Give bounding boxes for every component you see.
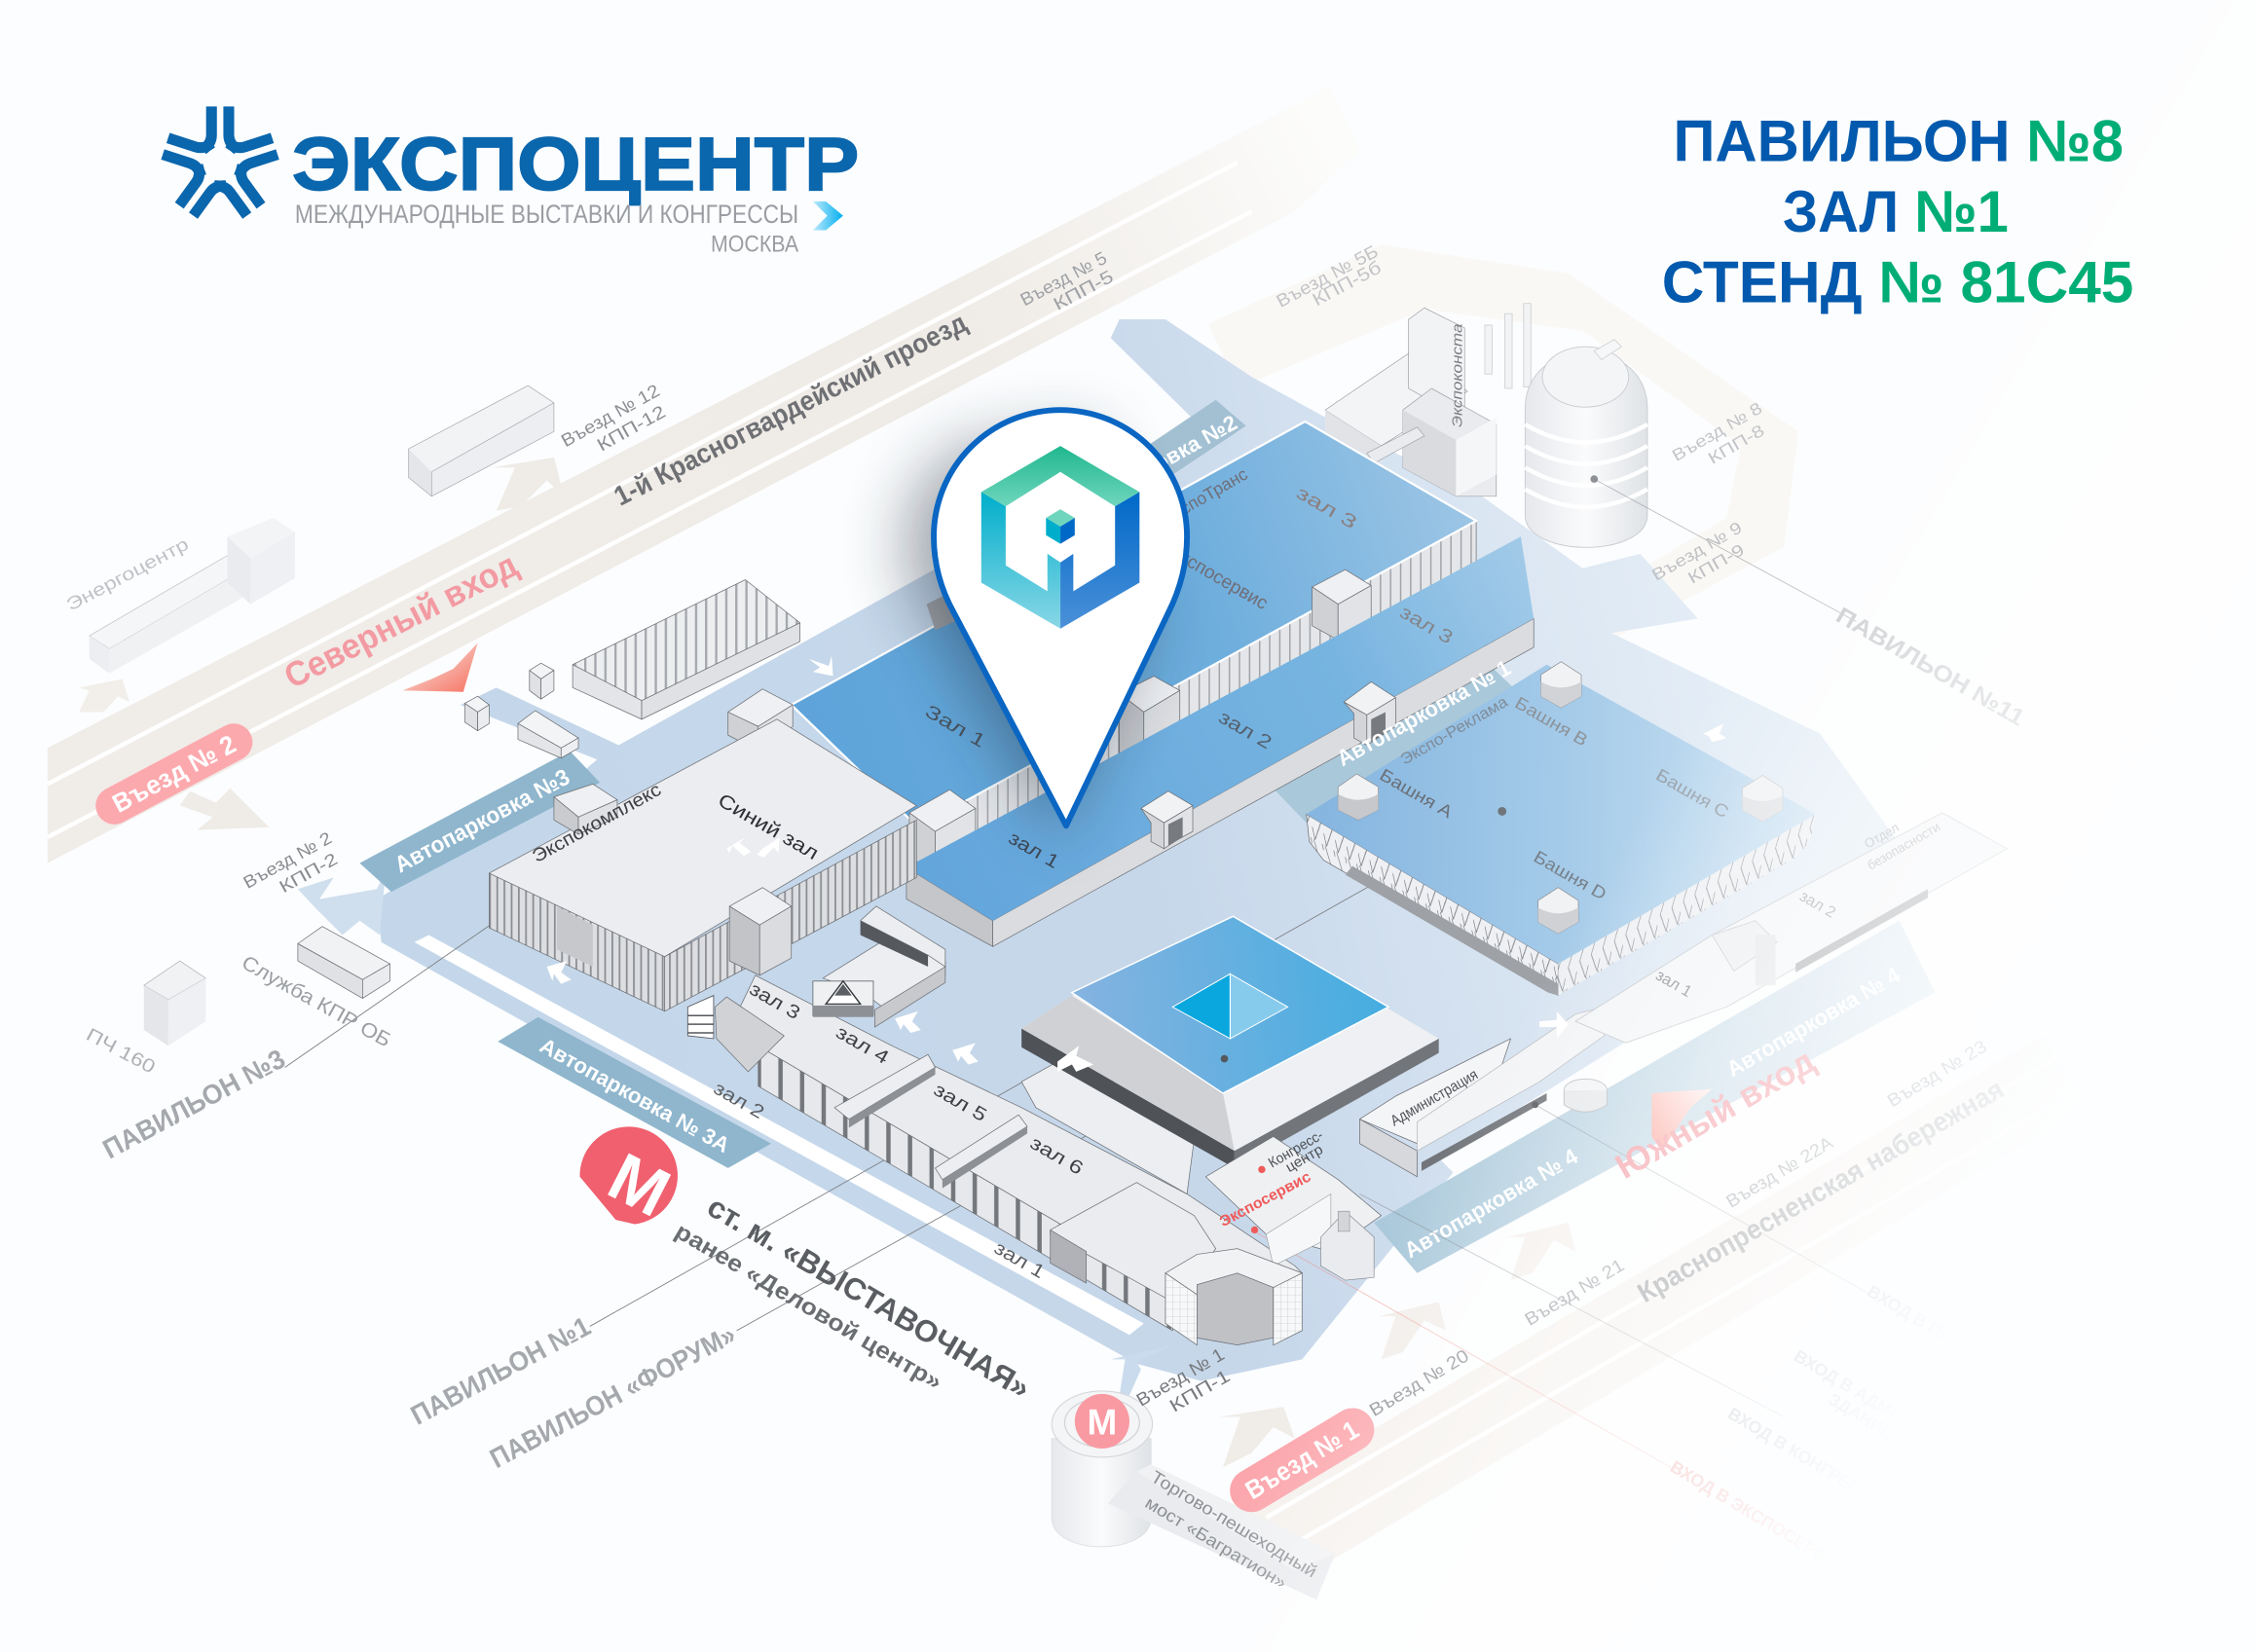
north labels: КПП-8 — [1705, 422, 1767, 468]
white direction arrows — [547, 656, 1726, 1072]
building: factory Экспоконсетта — [1325, 304, 1531, 496]
building: long halls 3–6 roof and wall: зал 2 — [710, 1079, 767, 1123]
building: east halls Зал 1 and Зал 2: Отдел — [1862, 820, 1902, 851]
metro cylinder with bridge: мост «Багратион» — [1142, 1492, 1290, 1593]
label: ст. м. Выставочная: ст. м. «ВЫСТАВОЧНАЯ» — [702, 1190, 1036, 1406]
building: Экспокомплекс / Синий зал — [489, 719, 916, 1011]
north labels — [62, 240, 2028, 731]
building: Въезд № 12 — [409, 385, 554, 496]
south entrance labels: ВХОД В ПАВИЛЬОН — [1864, 1281, 2020, 1385]
building: Павильон 8, lower hall with Зал 1 — [906, 536, 1534, 946]
ground plate — [298, 319, 1913, 1381]
building: Конгресс-центр with Экспосервис: Конгресс- — [1266, 1127, 1326, 1171]
building: Экспо arena with four towers — [1307, 654, 1816, 996]
building: east halls Зал 1 and Зал 2 — [1575, 813, 2007, 1043]
building: Павильон 8, lower hall with Зал 1: зал 2 — [1215, 707, 1275, 753]
building: Энергоцентр — [90, 518, 295, 674]
north labels: КПП-9 — [1684, 540, 1748, 587]
pill: Въезд № 1 — [1222, 1400, 1383, 1520]
building: Экспо arena with four towers: Башня B — [1512, 693, 1591, 750]
west labels: КПП-2 — [276, 849, 341, 897]
south entrance labels: Въезд № 22А — [1722, 1131, 1837, 1212]
building: Администрация: Администрация — [1387, 1067, 1481, 1130]
road: east service arc — [1208, 244, 1798, 641]
west labels: Въезд № 2 — [240, 828, 335, 893]
north labels: КПП-5б — [1309, 257, 1385, 310]
south entrance labels — [1132, 1036, 2020, 1579]
icon: chevron — [813, 202, 843, 230]
building: Павильон 8, upper hall roof: Экспосервис — [1165, 540, 1272, 614]
south entrance labels: ЗДАНИЕ — [1826, 1389, 1897, 1443]
building: factory Экспоконсетта: Экспоконста — [1450, 323, 1465, 427]
band: Автопарковка №2 — [1036, 400, 1246, 547]
logo: Экспоцентр — [160, 106, 859, 258]
south entrance labels: Южный вход — [1609, 1041, 1822, 1187]
north labels: Въезд № 8 — [1669, 399, 1765, 465]
south entrance labels: Въезд № 1 — [1132, 1343, 1228, 1411]
building: east halls Зал 1 and Зал 2: безопасности — [1865, 820, 1942, 873]
heading: stand information — [1662, 108, 2133, 314]
building: ПЧ 160 — [144, 961, 205, 1046]
building: cylinder tower — [1525, 340, 1647, 547]
white access strip — [415, 936, 1144, 1335]
label: Автопарковка №2: Автопарковка №2 — [1061, 410, 1241, 525]
building: east halls Зал 1 and Зал 2: зал 2 — [1796, 887, 1838, 922]
label: Северный вход: Северный вход — [277, 545, 524, 696]
logo: Экспоцентр: МОСКВА — [711, 233, 798, 258]
pill: Въезд № 1: Въезд № 1 — [1240, 1414, 1364, 1505]
band: Автопарковка № 4: Автопарковка № 4 — [1722, 962, 1905, 1082]
pill: Въезд № 2: Въезд № 2 — [107, 729, 240, 819]
building: long halls 3–6 roof and wall — [710, 975, 1302, 1331]
north labels: КПП-12 — [593, 401, 669, 456]
icon: metro marker: М — [597, 1138, 682, 1231]
icon: star emblem — [160, 106, 280, 221]
building: Служба КПР ОБ — [298, 927, 389, 999]
road title: 1-й Красногвардейский проезд: 1-й Красногвардейский проезд — [610, 307, 972, 512]
building: Конгресс-центр with Экспосервис: Экспосервис — [1217, 1168, 1314, 1230]
road: 1-й Красногвардейский проезд — [48, 87, 1359, 863]
label: ст. м. Выставочная: ранее «Деловой центр» — [671, 1219, 946, 1396]
building: Администрация — [1359, 1007, 1608, 1177]
arrow: Южный вход — [1651, 1089, 1712, 1151]
building: annex near Зал 3 — [823, 906, 945, 1027]
building: Экспокомплекс / Синий зал: Синий зал — [714, 789, 822, 864]
building: pavilion with blue roof and pyramid — [1021, 916, 1439, 1168]
metro cylinder with bridge — [1052, 1391, 1335, 1599]
building: side block Зал 2 — [687, 996, 784, 1072]
icon: cube logo — [981, 446, 1139, 629]
small kiosks north — [464, 663, 578, 758]
north labels: Въезд № 5 — [1017, 247, 1110, 310]
pin shadow — [905, 431, 1151, 841]
logo: Экспоцентр: МЕЖДУНАРОДНЫЕ ВЫСТАВКИ И КОНГРЕССЫ — [295, 200, 798, 229]
heading: stand information: СТЕНД № 81С45 — [1662, 248, 2133, 314]
band: Автопарковка № 4 — [1374, 921, 1935, 1273]
building: Экспо arena with four towers: Башня C — [1652, 765, 1732, 822]
building: long halls 3–6 roof and wall: зал 6 — [1026, 1133, 1087, 1180]
west labels — [83, 828, 741, 1474]
south entrance labels: КПП-1 — [1165, 1365, 1234, 1416]
building: Конгресс-центр with Экспосервис: центр — [1283, 1142, 1326, 1176]
band: Автопарковка № 4: Автопарковка № 4 — [1400, 1143, 1582, 1263]
north labels: Энергоцентр — [62, 533, 192, 615]
west labels: ПАВИЛЬОН №3 — [98, 1044, 290, 1164]
arrow: Въезд № 1 КПП-1 — [1111, 1345, 1172, 1395]
south entrance labels: ВХОД В АДМИНИСТРАТ. — [1791, 1346, 1977, 1468]
building: Павильон 8, lower hall with Зал 1: зал 1 — [1005, 828, 1062, 873]
band: Автопарковка №3: Автопарковка №3 — [390, 765, 574, 878]
building: east halls Зал 1 and Зал 2: зал 1 — [1652, 967, 1695, 1001]
building: long halls 3–6 roof and wall: зал 4 — [832, 1022, 893, 1069]
west labels: ПЧ 160 — [83, 1025, 159, 1078]
north labels: Въезд № 9 — [1648, 518, 1745, 584]
band: Автопарковка №3 — [359, 751, 600, 892]
metro cylinder with bridge: Торгово-пешеходный — [1148, 1467, 1320, 1581]
road: Краснопресненская набережная — [1220, 1036, 2087, 1560]
arrow: Северный вход — [403, 643, 478, 692]
heading: stand information: ПАВИЛЬОН №8 — [1674, 108, 2124, 174]
north labels: Въезд № 5Б — [1273, 240, 1382, 312]
west labels: ПАВИЛЬОН №1 — [406, 1311, 595, 1431]
south entrance labels: Въезд № 20 — [1365, 1345, 1472, 1420]
building: church — [1321, 1211, 1374, 1280]
band: Автопарковка №1 — [1269, 665, 1519, 823]
building: Павильон 8, upper hall roof: зал 3 — [1292, 483, 1360, 533]
west labels: ПАВИЛЬОН «ФОРУМ» — [485, 1319, 741, 1474]
building: long halls 3–6 roof and wall: зал 1 — [990, 1238, 1048, 1283]
north labels: Въезд № 12 — [557, 380, 663, 451]
south entrance labels: Въезд № 21 — [1521, 1255, 1628, 1330]
south entrance labels: Въезд № 23 — [1883, 1036, 1990, 1111]
south entrance labels: ВХОД В ЭКСПОСЕРВИС — [1667, 1456, 1852, 1579]
metro cylinder with bridge: М — [1088, 1402, 1117, 1442]
building: Павильон 8, lower hall with Зал 1: зал 3 — [1396, 603, 1456, 648]
west labels: Служба КПР ОБ — [238, 951, 394, 1051]
map pin — [934, 410, 1187, 826]
band: Автопарковка № 3А — [498, 1017, 771, 1168]
building: Павильон 8, upper hall roof: Зал 1 — [921, 702, 989, 753]
soft left fade of the roads — [0, 690, 48, 921]
logo: Экспоцентр: ЭКСПОЦЕНТР — [292, 123, 859, 206]
building: Экспокомплекс / Синий зал: Экспокомплекс — [529, 780, 665, 867]
building: Павильон 8, upper hall roof — [728, 422, 1476, 871]
building: Экспо arena with four towers: Автопарковка № 1 — [1332, 654, 1515, 771]
south entrance labels: Краснопресненская набережная — [1632, 1074, 2009, 1308]
building: Экспо arena with four towers: Башня A — [1377, 765, 1456, 822]
north labels: КПП-5 — [1050, 266, 1117, 314]
leader lines — [285, 479, 1870, 1475]
building: long halls 3–6 roof and wall: зал 3 — [746, 979, 803, 1024]
building: Экспо arena with four towers: Экспо-Реклама — [1397, 692, 1512, 769]
south entrance labels: ВХОД В КОНГРЕСС-ЦЕНТР — [1724, 1404, 1931, 1538]
band: Автопарковка № 3А: Автопарковка № 3А — [536, 1033, 734, 1157]
building: long halls 3–6 roof and wall: зал 5 — [930, 1080, 990, 1126]
north labels: ПАВИЛЬОН №11 — [1831, 604, 2028, 731]
building: Павильон 8, upper hall roof: ЭкспоТранс — [1159, 464, 1251, 529]
pill: Въезд № 2 — [89, 716, 259, 831]
building: corner tower — [1165, 1249, 1302, 1345]
building: hangar — [573, 580, 800, 719]
building: small pyramid monument — [813, 981, 873, 1017]
heading: stand information: ЗАЛ №1 — [1783, 178, 2009, 244]
building: Конгресс-центр with Экспосервис — [1205, 1127, 1382, 1266]
building: Экспо arena with four towers: Башня D — [1531, 847, 1609, 904]
